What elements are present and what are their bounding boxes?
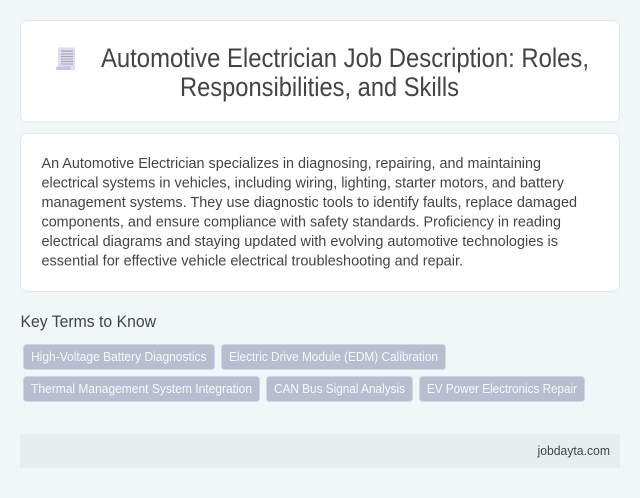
heading: key terms: Key Terms to Know [20,313,156,331]
tag: ev power electronics repair [420,376,584,402]
tag: high-voltage battery diagnostics [24,344,214,370]
description text: components, and ensure compliance with safety standards. Proficiency in reading [42,214,561,230]
description text: electrical systems in vehicles, including wiring, lighting, starter motors, and battery [42,176,565,192]
tag group: key terms [24,344,584,402]
tag: can bus signal analysis: CAN Bus Signal Analysis [274,381,405,396]
description text [42,156,577,270]
description text: management systems. They use diagnostic tools to identify faults, replace damaged [42,195,577,211]
tag: high-voltage battery diagnostics: High-Voltage Battery Diagnostics [31,349,207,364]
description text: An Automotive Electrician specializes in diagnosing, repairing, and maintaining [42,156,541,172]
tag: can bus signal analysis [266,376,412,402]
tag: ev power electronics repair: EV Power Electronics Repair [427,381,578,396]
title [101,43,589,102]
tag: thermal management system integration [24,376,260,402]
tag: thermal management system integration: Thermal Management System Integration [31,381,252,396]
description text: electrical diagrams and staying updated with evolving automotive technologies is [42,234,558,250]
title: Responsibilities, and Skills [180,72,459,102]
panel: title card [20,20,620,122]
title: Automotive Electrician Job Description: Roles, [101,43,589,73]
footer bar [20,434,620,468]
tag: electric drive module calibration [222,344,446,370]
panel: description card [20,134,620,292]
footer source text: jobdayta.com [537,443,610,458]
icon: document scroll [56,48,75,70]
tag: electric drive module calibration: Electric Drive Module (EDM) Calibration [229,349,438,364]
description text: essential for effective vehicle electrical troubleshooting and repair. [42,254,463,270]
